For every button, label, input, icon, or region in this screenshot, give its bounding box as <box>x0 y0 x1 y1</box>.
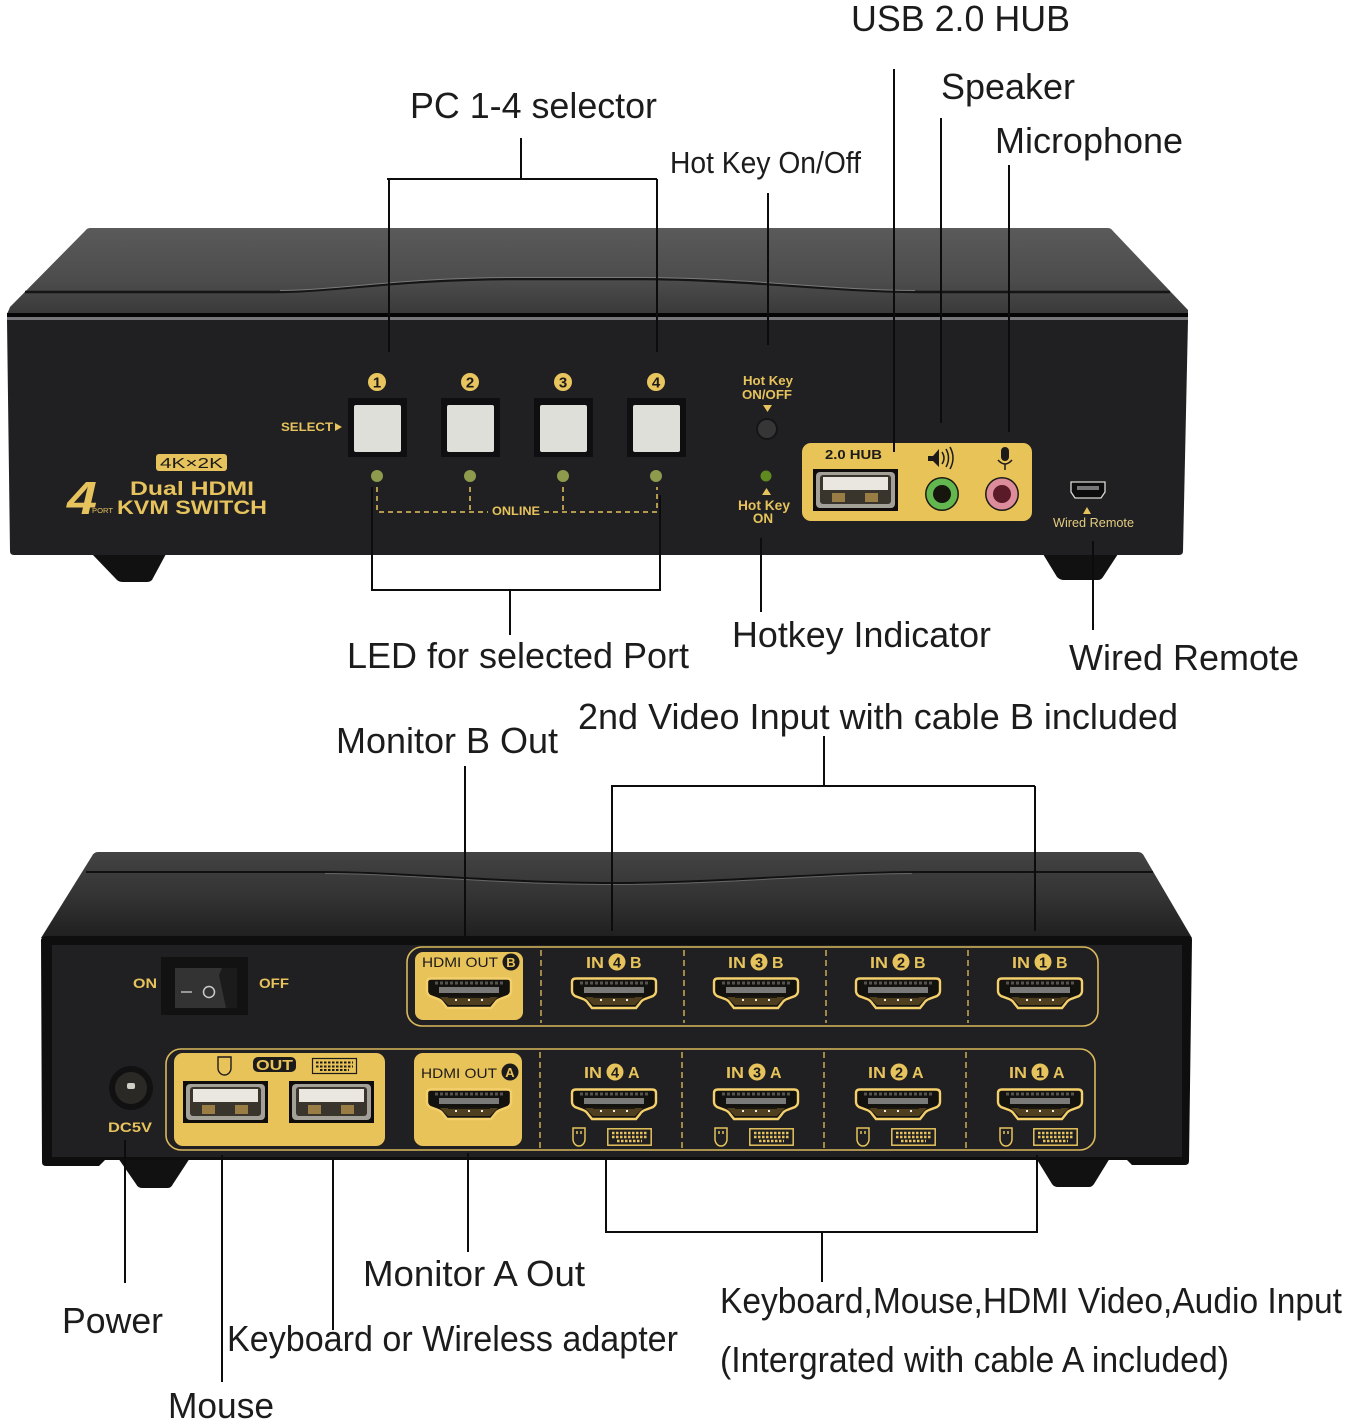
power switch: OFF <box>259 975 289 991</box>
logo: PORT <box>92 508 114 515</box>
online dashed bracket: ONLINE <box>492 504 540 518</box>
hot key on/off control <box>742 373 794 440</box>
hub panel <box>802 443 1032 521</box>
hot key on/off control: Hot Key <box>743 373 794 388</box>
HDMI out A: A <box>505 1065 515 1080</box>
USB out block <box>174 1053 385 1146</box>
inputs B <box>572 954 1082 1008</box>
inputs A <box>572 1064 1082 1146</box>
pink mic jack <box>985 477 1019 511</box>
inputs A: A <box>1053 1065 1065 1082</box>
inputs A: IN <box>868 1065 886 1082</box>
port number badges: 3 <box>559 374 567 392</box>
callout: 2nd Video Input: 2nd Video Input with cable B included <box>578 696 1178 737</box>
hot key on/off control: ON/OFF <box>742 387 792 402</box>
inputs A: 4 <box>611 1066 619 1082</box>
callouts: front view <box>347 0 1299 678</box>
power switch <box>133 957 289 1015</box>
callout: Keyboard, Mouse, HDMI Video, Audio Input: (Intergrated with cable A included) <box>720 1339 1229 1380</box>
inputs B: IN <box>1012 955 1030 972</box>
4K×2K badge: 4K×2K <box>160 455 223 472</box>
select label: SELECT <box>281 420 334 434</box>
inputs B: 2 <box>897 956 905 972</box>
logo: 4 <box>66 472 97 524</box>
inputs B: B <box>914 955 926 972</box>
green audio jack <box>925 477 959 511</box>
usb port <box>813 469 898 511</box>
inputs A: 3 <box>753 1066 761 1082</box>
callout: Power: Power <box>62 1300 163 1341</box>
HDMI out B: B <box>506 955 516 970</box>
callout: Monitor A Out: Monitor A Out <box>363 1253 585 1294</box>
panel: row A <box>166 1049 1095 1150</box>
inputs B: B <box>630 955 642 972</box>
top ridge <box>25 278 1170 292</box>
callout: Hotkey Indicator: Hotkey Indicator <box>732 614 991 655</box>
callout: 2nd Video Input <box>578 696 1178 931</box>
front lip <box>7 313 1188 320</box>
inputs B: B <box>1056 955 1068 972</box>
device: front view <box>7 228 1188 582</box>
callout: PC 1-4 selector: PC 1-4 selector <box>410 85 657 126</box>
logo <box>66 454 267 524</box>
wired remote port: Wired Remote <box>1053 516 1134 530</box>
callouts: rear view <box>62 696 1342 1426</box>
front face <box>7 320 1188 555</box>
top face <box>41 852 1192 938</box>
inputs A: 2 <box>895 1066 903 1082</box>
power jack <box>108 1066 153 1135</box>
port number badges: 1 <box>373 374 381 392</box>
port number badges: 2 <box>466 374 474 392</box>
port number badges: 4 <box>652 374 661 392</box>
right foot <box>1036 1158 1110 1187</box>
hot key indicator: Hot Key <box>738 498 790 513</box>
device: rear view <box>41 852 1192 1188</box>
port LEDs <box>371 470 662 482</box>
inputs A: A <box>912 1065 924 1082</box>
inputs A: IN <box>726 1065 744 1082</box>
HDMI out A: HDMI OUT <box>421 1065 497 1081</box>
hot key indicator <box>738 470 790 526</box>
inputs B: 4 <box>613 956 621 972</box>
inputs A: A <box>770 1065 782 1082</box>
top face <box>7 228 1188 316</box>
callout: Mouse: Mouse <box>168 1385 274 1426</box>
power jack: DC5V <box>108 1119 153 1135</box>
inputs B: B <box>772 955 784 972</box>
callout: Microphone: Microphone <box>995 120 1183 161</box>
callout: Keyboard or Wireless adapter: Keyboard or Wireless adapter <box>227 1318 678 1359</box>
callout: LED for selected Port: LED for selected Port <box>347 635 689 676</box>
wired remote port <box>1053 482 1134 530</box>
HDMI out B <box>415 952 523 1020</box>
inputs B: IN <box>586 955 604 972</box>
power switch: ON <box>133 975 157 991</box>
port number badges <box>368 373 665 392</box>
selector buttons <box>348 398 686 457</box>
inputs A: A <box>628 1065 640 1082</box>
inputs A: 1 <box>1036 1066 1044 1082</box>
right foot <box>1043 554 1118 580</box>
left foot <box>92 554 166 582</box>
hub panel: 2.0 HUB <box>825 447 882 462</box>
speaker icon <box>928 447 953 469</box>
callout: Speaker: Speaker <box>941 66 1075 107</box>
inputs B: IN <box>728 955 746 972</box>
rear face <box>41 936 1192 1166</box>
callout: Monitor B Out: Monitor B Out <box>336 720 558 761</box>
callout: Hot Key On/Off: Hot Key On/Off <box>670 145 861 180</box>
callout: Wired Remote: Wired Remote <box>1069 637 1299 678</box>
callout: PC 1-4 selector <box>387 85 657 352</box>
HDMI out B: HDMI OUT <box>422 954 498 970</box>
inputs A: IN <box>584 1065 602 1082</box>
inputs B: 3 <box>755 956 763 972</box>
logo: Dual HDMI <box>130 479 254 500</box>
HDMI out A <box>414 1053 522 1146</box>
logo: KVM SWITCH <box>117 498 267 519</box>
callout: LED for selected Port <box>347 487 689 676</box>
left foot <box>118 1158 190 1188</box>
inputs B: 1 <box>1039 956 1047 972</box>
USB out block: OUT <box>256 1057 293 1074</box>
mic icon <box>998 447 1012 470</box>
inputs B: IN <box>870 955 888 972</box>
4K×2K badge <box>156 454 227 472</box>
callout: Keyboard, Mouse, HDMI Video, Audio Input <box>606 1155 1342 1380</box>
panel: row B <box>407 947 1098 1026</box>
top ridge <box>86 872 1153 884</box>
inputs A: IN <box>1009 1065 1027 1082</box>
online dashed bracket <box>377 487 657 518</box>
hot key indicator: ON <box>753 511 773 526</box>
